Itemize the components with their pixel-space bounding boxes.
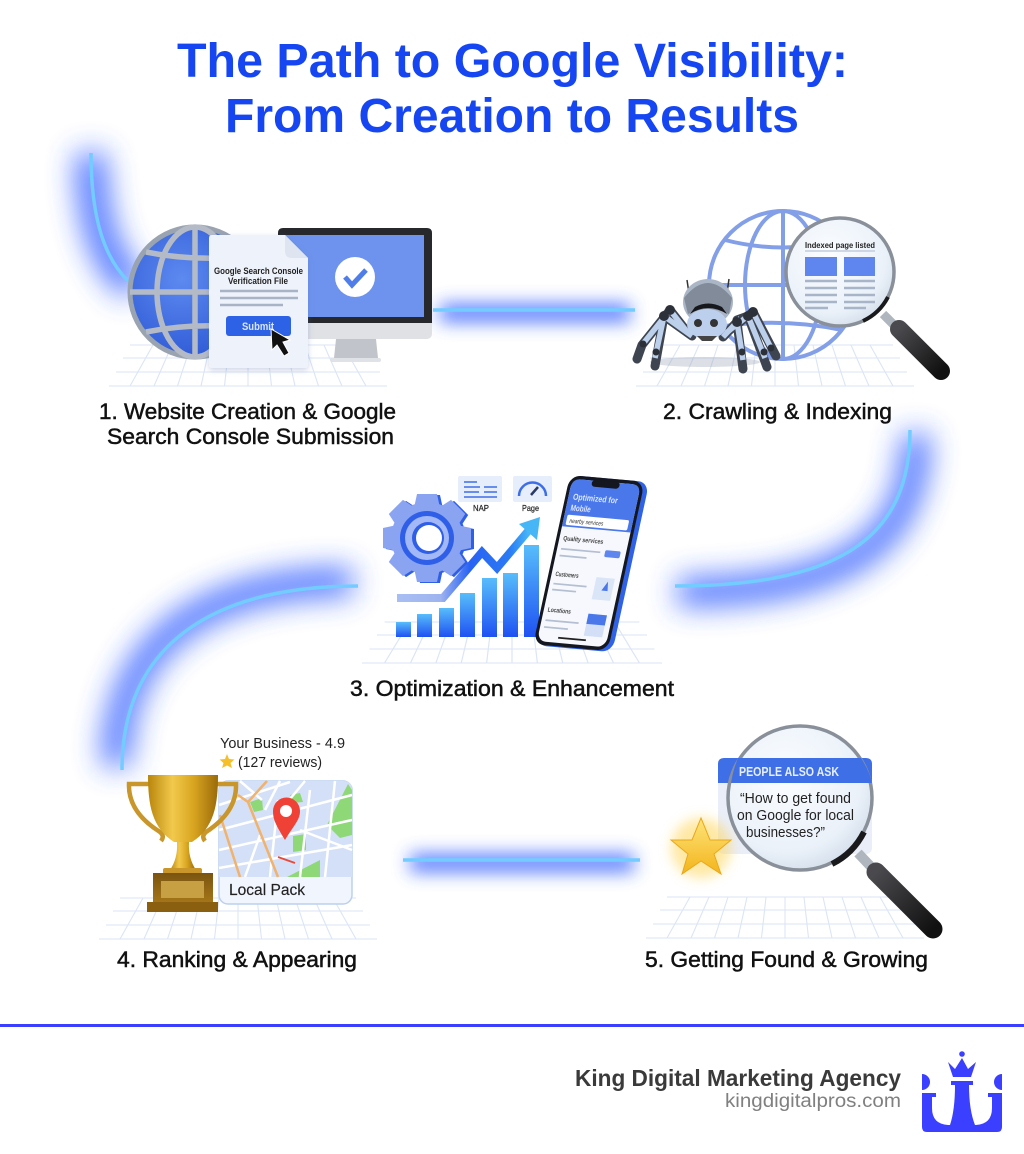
icon: magnifier: “How to get found <box>740 790 851 807</box>
panel: step 1 website creation <box>109 227 432 386</box>
icon: magnifier: PEOPLE ALSO ASK <box>739 764 839 779</box>
panel: step 3 optimization <box>362 475 662 663</box>
icon: verification document: Google Search Console <box>214 266 303 277</box>
card: local pack map: Local Pack <box>229 882 306 899</box>
card: NAP <box>458 476 502 513</box>
text: business rating: (127 reviews) <box>238 754 322 771</box>
icon: smartphone: Customers <box>555 571 580 580</box>
text: business rating: Your Business - 4.9 <box>220 735 345 752</box>
card: local pack map <box>219 781 352 904</box>
label: step 4: 4. Ranking & Appearing <box>117 947 357 972</box>
arrow: path from title into step 1 <box>91 153 135 287</box>
floor grid <box>109 345 387 386</box>
footer: agency name: kingdigitalpros.com <box>725 1091 901 1112</box>
icon: wire globe <box>709 211 857 359</box>
icon: glowing star <box>671 818 731 878</box>
card: page speed: Page <box>522 503 539 513</box>
icon: magnifier with page: Indexed page listed <box>805 241 875 250</box>
card: NAP: NAP <box>473 503 489 513</box>
icon: magnifier: on Google for local <box>737 807 854 824</box>
icon: monitor <box>278 228 432 362</box>
arrow: growth trend <box>397 517 540 598</box>
arrow: step 2 to step 3 <box>675 430 916 592</box>
text: business rating <box>220 735 345 771</box>
icon: verification document: Verification File <box>228 276 288 287</box>
floor grid <box>646 897 924 938</box>
icon: smartphone: Optimized for <box>572 492 619 506</box>
icon: cursor <box>271 329 290 356</box>
icon: magnifier with page <box>786 218 941 371</box>
icon: magnifier: businesses?” <box>746 824 825 841</box>
title: The Path to Google Visibility: <box>177 35 848 88</box>
arrow: step 4 to step 5 <box>403 860 640 863</box>
card: people also ask <box>718 758 872 854</box>
icon: small star <box>220 754 234 768</box>
icon: gear <box>383 494 474 583</box>
icon: globe <box>130 227 260 357</box>
icon: magnifier <box>728 726 933 929</box>
icon: smartphone: Mobile <box>570 503 592 514</box>
icon: smartphone: Quality services <box>562 535 605 546</box>
label: step 1: Search Console Submission <box>107 424 394 449</box>
label: step 5: 5. Getting Found & Growing <box>645 947 928 972</box>
label: step 2: 2. Crawling & Indexing <box>663 399 892 424</box>
panel: step 5 getting found <box>646 726 933 938</box>
footer: agency name: King Digital Marketing Agency <box>575 1065 901 1091</box>
label: step 3: 3. Optimization & Enhancement <box>350 676 674 701</box>
icon: smartphone: Locations <box>547 606 572 616</box>
panel: step 4 ranking <box>99 735 377 939</box>
card: page speed <box>513 476 552 513</box>
icon: smartphone <box>533 475 649 652</box>
floor grid <box>636 345 914 386</box>
icon: smartphone: nearby services <box>569 518 604 528</box>
icon: verification document: Submit <box>242 321 274 333</box>
title <box>177 35 848 143</box>
floor grid <box>99 898 377 939</box>
icon: king logo <box>922 1051 1002 1132</box>
bar chart <box>396 545 539 637</box>
icon: robot spider <box>637 279 776 369</box>
arrow: step 3 to step 4 <box>116 582 358 770</box>
footer divider <box>0 1024 1024 1027</box>
icon: trophy <box>129 775 236 912</box>
panel: step 2 crawling <box>636 211 941 386</box>
floor grid <box>362 622 662 663</box>
footer: agency name <box>575 1065 901 1112</box>
title: From Creation to Results <box>225 90 799 143</box>
arrow: step 1 to step 2 <box>433 310 635 313</box>
label: step 1 <box>99 399 396 449</box>
label: step 1: 1. Website Creation & Google <box>99 399 396 424</box>
icon: verification document <box>209 235 308 368</box>
